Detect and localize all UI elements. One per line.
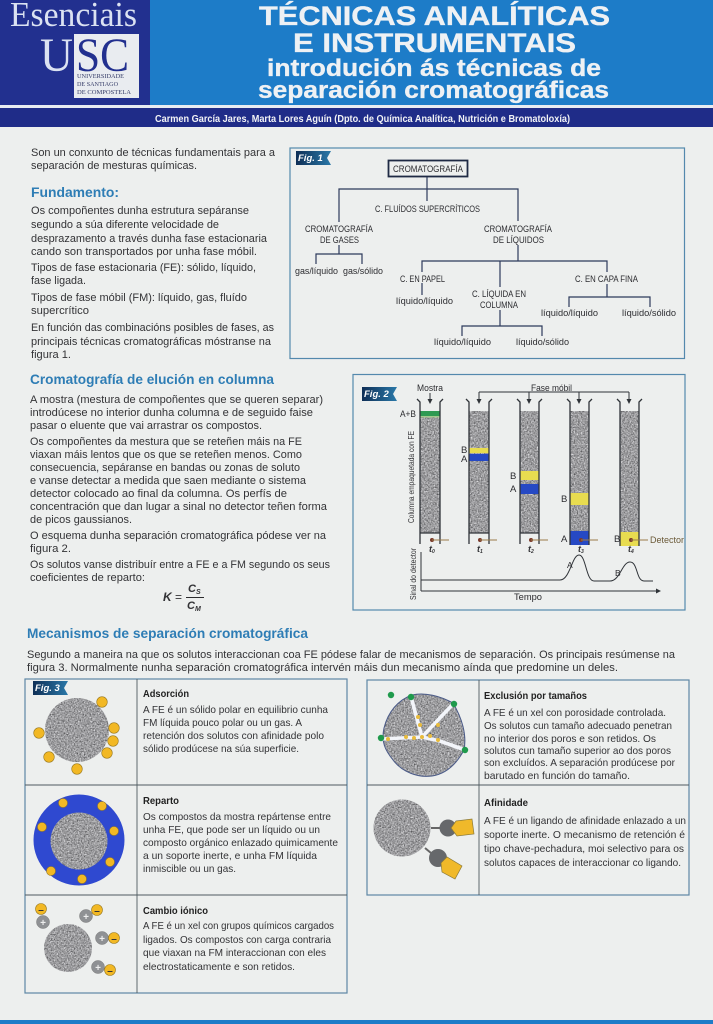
root node [388, 160, 468, 176]
figure tag: Fig. 2 [362, 387, 397, 401]
section: Fundamento [31, 184, 274, 361]
text: Reparto: a un soporte inerte, e unha FM líquida [143, 850, 317, 862]
figure 2 labels: 1 [480, 549, 483, 555]
heading: elución: Cromatografía de elución en columna [30, 371, 274, 387]
icon: ion exchange: – [38, 905, 44, 916]
formula: = [175, 590, 182, 604]
icon: ion exchange: – [94, 906, 100, 917]
formula: K [163, 590, 173, 604]
figure 2 labels: t [578, 544, 581, 554]
figure 2 labels: Sinal do detector [408, 548, 418, 600]
formula: C [187, 600, 195, 612]
formula: S [196, 589, 201, 596]
icon: partition [34, 794, 124, 886]
text: Exclusión por tamaños: no interior dos poros e son retidos. Os [484, 733, 656, 745]
text block: Fundamento: cando son transportados por unha fase móbil. [31, 246, 257, 258]
figure 2 labels: A [461, 454, 468, 465]
icon: ion exchange: + [95, 963, 101, 974]
figure 2 labels: Tempo [514, 592, 542, 603]
figure 2 labels: A [510, 484, 517, 495]
text block: Fundamento: principais técnicas cromatográficas móstranse na [31, 336, 272, 348]
text: Reparto: Os compostos da mostra repártense entre [143, 811, 331, 823]
column t0 [417, 399, 449, 544]
panel: figure 3 left table [25, 679, 347, 993]
formula: M [195, 606, 201, 613]
text: Exclusión por tamaños: Exclusión por tamaños [484, 690, 587, 702]
text: Reparto: unha FE, que pode ser un líquido ou un [143, 824, 320, 836]
title [258, 0, 610, 104]
text block: Fundamento: Os compoñentes dunha estrutura sepáranse [31, 205, 249, 217]
title: TÉCNICAS ANALÍTICAS [259, 0, 610, 31]
text: Reparto: Reparto [143, 795, 179, 807]
tree labels: CROMATOGRAFÍA [305, 224, 373, 235]
panel: figure 1 tree [290, 148, 684, 358]
formula [163, 583, 204, 613]
icon: ion exchange: – [107, 966, 113, 977]
figure 2 labels: 3 [581, 549, 584, 555]
tree labels: líquido/líquido [396, 296, 453, 307]
logo: Esenciais USC: DE COMPOSTELA [77, 90, 132, 96]
figure 2 labels: B [561, 494, 567, 505]
icon: size exclusion [378, 692, 468, 776]
text block: elución: O esquema dunha separación cromatográfica pódese ver na [30, 530, 327, 542]
text block: elución: Os compoñentes da mestura que se reteñen máis na FE [30, 436, 302, 448]
arrow: sample [429, 393, 431, 403]
text: Adsorción: A FE é un sólido polar en equilibrio cunha [143, 704, 328, 716]
text: Adsorción: FM líquida pouco polar ou un gas. A [143, 717, 302, 729]
text block: Fundamento: desprazamento a través dunha fase estacionaria [31, 233, 268, 245]
text: Cambio iónico [143, 905, 334, 973]
tree labels: gas/sólido [343, 266, 383, 277]
figure 2 labels: t [477, 544, 480, 554]
text block: Fundamento: Tipos de fase estacionaria (FE): sólido, líquido, [31, 262, 256, 274]
logo: Esenciais USC: DE SANTIAGO [77, 82, 119, 88]
figure 2 labels: B [461, 445, 467, 456]
text block: mecanismos intro [27, 649, 676, 674]
heading: mecanismos: Mecanismos de separación cromatográfica [27, 625, 308, 641]
tree labels: CROMATOGRAFÍA [484, 224, 552, 235]
text block: elución: e vanse detectar a medida que saen mediante o sistema [30, 475, 307, 487]
root node: CROMATOGRAFÍA [393, 164, 463, 175]
title: introdución ás técnicas de [267, 55, 601, 82]
figure 2 labels: B [510, 471, 516, 482]
heading: Fundamento: Fundamento: [31, 184, 119, 200]
figure 2 labels: t [429, 544, 432, 554]
column t2 [517, 399, 548, 544]
figure 2 labels: 4 [630, 549, 634, 555]
logo: Esenciais USC: UNIVERSIDADE [77, 74, 124, 80]
text: Afinidade: Afinidade [484, 797, 528, 809]
text: Adsorción [143, 688, 328, 755]
text: Exclusión por tamaños: solutos cun tamaño superior ao dos poros [484, 745, 671, 757]
tree labels: líquido/sólido [516, 337, 569, 348]
tree labels: líquido/líquido [434, 337, 491, 348]
tree connectors [316, 177, 650, 336]
tree labels [295, 204, 676, 348]
section: Cromatografía de elución en columna [30, 371, 330, 613]
text: Cambio iónico: Cambio iónico [143, 905, 208, 917]
icon: ion exchange: + [40, 918, 46, 929]
text: Exclusión por tamaños: A FE é un xel con porosidade controlada. [484, 707, 666, 719]
tree labels: DE LÍQUIDOS [493, 235, 544, 246]
title: E INSTRUMENTAIS [293, 28, 576, 58]
intro text [31, 147, 276, 172]
tree labels: C. FLUÍDOS SUPERCRÍTICOS [375, 204, 480, 215]
figure 2 labels: A [567, 560, 573, 570]
text block: elución: viaxan máis lentos que os que se reteñen menos. Como [30, 449, 302, 461]
text: Exclusión por tamaños [484, 690, 675, 782]
text: Reparto [143, 795, 338, 875]
text: Adsorción: sólido prodúcese na súa superficie. [143, 743, 299, 755]
title: separación cromatográficas [258, 77, 609, 104]
figure tag: Fig. 2: Fig. 2 [364, 389, 390, 400]
formula: C [188, 583, 196, 595]
header banner [0, 0, 713, 127]
figure 2 labels: Columna empaquetada con FE [406, 431, 416, 523]
text: Exclusión por tamaños: son excluídos. A separación prodúcese por [484, 757, 675, 769]
figure 2 labels: A [561, 534, 568, 545]
authors: Carmen García Jares, Marta Lores Aguín (Dpto. de Química Analítica, Nutrición e Bromatoloxía) [155, 113, 570, 125]
text block: Fundamento: figura 1. [31, 349, 71, 361]
figure 2 labels: Fase móbil [531, 383, 572, 394]
tree labels: gas/líquido [295, 266, 338, 277]
tree labels: C. EN CAPA FINA [575, 274, 638, 285]
figure 2 labels: 0 [432, 549, 435, 555]
icon: ion exchange: + [99, 934, 105, 945]
column t1 [466, 399, 497, 544]
text block: elución: pasar o eluente que vai arrastrar os compostos. [30, 420, 262, 432]
text block: elución: de picos gaussianos. [30, 514, 132, 526]
text: Adsorción: retención dos solutos con afinidade polo [143, 730, 324, 742]
text block: Fundamento [31, 205, 274, 361]
text: Cambio iónico: ligados. Os compostos con carga contraria [143, 934, 331, 946]
figure 2 labels: Detector [650, 535, 684, 546]
text: Cambio iónico: que viaxan na FM interaccionan con eles [143, 947, 326, 959]
text: Afinidade: solutos capaces de interaccionar co ligando. [484, 857, 681, 869]
icon: adsorption [34, 697, 119, 774]
text: Adsorción: Adsorción [143, 688, 189, 700]
figure 2 labels [400, 383, 684, 603]
text: Reparto: composto orgánico enlazado quimicamente [143, 837, 338, 849]
text: Reparto: inmiscible ou un gas. [143, 863, 236, 875]
logo: Esenciais USC: SC [76, 29, 129, 82]
text block: elución: coeficientes de reparto: [30, 572, 145, 584]
text block: mecanismos intro: figura 3. Normalmente nunha separación cromatográfica intervén máis dun mecanismo aínda que predomine un deles. [27, 662, 618, 674]
icon: affinity [374, 800, 474, 879]
figure 2 labels: Mostra [417, 383, 444, 394]
text block: Fundamento: Tipos de fase móbil (FM): líquido, gas, fluído [31, 292, 247, 304]
tree labels: C. EN PAPEL [400, 274, 446, 285]
detector signal chart [421, 552, 660, 591]
icon: ion exchange: – [111, 934, 117, 945]
text block: elución: Os solutos vanse distribuír entre a FE e a FM segundo os seus [30, 559, 330, 571]
text block: Fundamento: fase ligada. [31, 275, 86, 287]
text: Cambio iónico: A FE é un xel con grupos químicos cargados [143, 920, 334, 932]
figure tag: Fig. 3 [33, 681, 68, 695]
text: Afinidade: A FE é un ligando de afinidade enlazado a un [484, 815, 686, 827]
arrows: mobile phase bracket [479, 392, 629, 403]
text: Afinidade [484, 797, 686, 869]
text block: elución: consecuencia, sepáranse en bandas ou zonas de soluto [30, 462, 300, 474]
text: Exclusión por tamaños: barutado en función do tamaño. [484, 770, 630, 782]
panel: figure 3 right table [367, 680, 689, 895]
text: Afinidade: tipo chave-pechadura, moi selectivo para os [484, 843, 684, 855]
text block: elución: detector colocado ao final da columna. Os perfís de [30, 488, 287, 500]
figure tag: Fig. 1 [296, 151, 331, 165]
text block: elución: introdúcese no interior dunha columna e de seguido faise [30, 407, 313, 419]
column t4 [617, 399, 648, 546]
tree labels: DE GASES [320, 235, 359, 246]
text block: mecanismos intro: Segundo a maneira na que os solutos interaccionan coa FE pódese falar de mecanismos de separación. Os principais resúmense na [27, 649, 676, 661]
tree labels: líquido/líquido [541, 308, 598, 319]
text block: Fundamento: segundo a súa diferente velocidade de [31, 219, 219, 231]
intro text: separación de mesturas químicas. [31, 160, 197, 172]
section: Mecanismos [27, 625, 676, 674]
logo: Esenciais USC: U [40, 29, 73, 82]
tree labels: COLUMNA [480, 300, 518, 311]
figure 2 labels: B [614, 534, 620, 545]
icon: ion exchange: + [83, 912, 89, 923]
text block: elución: A mostra (mestura de compoñentes que se queren separar) [30, 394, 323, 406]
text block: elución: concentración que dan lugar a sinal no detector teñen forma [30, 501, 328, 513]
figure 2 labels: t [628, 544, 631, 554]
figure 2 labels: B [615, 568, 621, 578]
figure 2 labels: t [528, 544, 531, 554]
text block: elución [30, 394, 330, 584]
footer strip [0, 1020, 713, 1024]
figure tag: Fig. 1: Fig. 1 [298, 153, 323, 164]
tree labels: líquido/sólido [622, 308, 676, 319]
text block: Fundamento: En función das combinacións posibles de fases, as [31, 322, 274, 334]
column t3 [567, 399, 598, 545]
intro text: Son un conxunto de técnicas fundamentais para a [31, 147, 276, 159]
logo: Esenciais USC [0, 0, 150, 105]
icon: ion exchange [36, 904, 120, 977]
figure tag: Fig. 3: Fig. 3 [35, 683, 61, 694]
panel: figure 2 column chromatography [353, 374, 685, 610]
tree labels: C. LÍQUIDA EN [472, 289, 526, 300]
text block: elución: figura 2. [30, 543, 71, 555]
figure 2 labels: A+B [400, 409, 416, 420]
figure 2 labels: 2 [530, 549, 534, 555]
text block: Fundamento: supercrítico [31, 305, 89, 317]
text: Afinidade: soporte inerte. O mecanismo de retención é [484, 829, 685, 841]
text: Exclusión por tamaños: Os solutos cun tamaño adecuado penetran [484, 720, 672, 732]
text: Cambio iónico: electrostaticamente e son retidos. [143, 961, 295, 973]
